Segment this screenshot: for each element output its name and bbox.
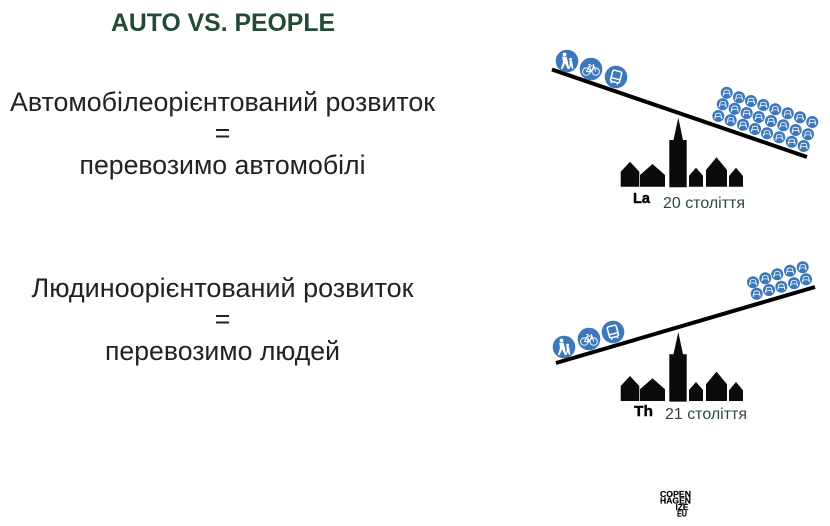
text block: car-oriented development (10, 87, 435, 180)
text block: car-oriented development: Автомобілеорієнтований розвиток (10, 87, 435, 117)
caption: 20th century: 20 століття (663, 195, 745, 212)
logo: Copenhagenize EU: EU (677, 510, 687, 518)
icon: pedestrians (556, 50, 578, 72)
seesaw beam (552, 70, 807, 157)
caption fragment: Th (634, 404, 653, 420)
text block: people-oriented development: = (215, 304, 230, 334)
logo: Copenhagenize EU: COPEN (660, 490, 691, 499)
icon: pedestrians (553, 336, 575, 358)
text block: people-oriented development: перевозимо людей (105, 336, 340, 366)
icon group: few cars (747, 261, 812, 300)
caption: 21st century: 21 століття (665, 406, 747, 423)
icon: bicycle (580, 58, 602, 80)
text block: people-oriented development (32, 273, 414, 366)
caption fragment: La (633, 191, 651, 207)
icon: city skyline (621, 118, 743, 187)
icon group: many cars (712, 87, 818, 152)
text block: car-oriented development: перевозимо автомобілі (80, 150, 366, 180)
logo: Copenhagenize EU: HAGEN (660, 496, 691, 506)
diagram: 20th century scale tipped toward cars (552, 50, 818, 212)
seesaw beam (556, 287, 815, 363)
diagram: 21st century scale tipped toward people (553, 261, 815, 423)
text block: people-oriented development: Людиноорієнтований розвиток (32, 273, 414, 303)
icon: bus (602, 63, 630, 91)
title: AUTO VS. PEOPLE (111, 9, 335, 37)
logo: Copenhagenize EU: IZE (676, 503, 689, 512)
icon: bus (599, 318, 627, 346)
text block: car-oriented development: = (215, 118, 230, 148)
icon: bicycle (578, 328, 600, 350)
logo: Copenhagenize EU (660, 490, 691, 518)
icon: city skyline (621, 332, 743, 402)
